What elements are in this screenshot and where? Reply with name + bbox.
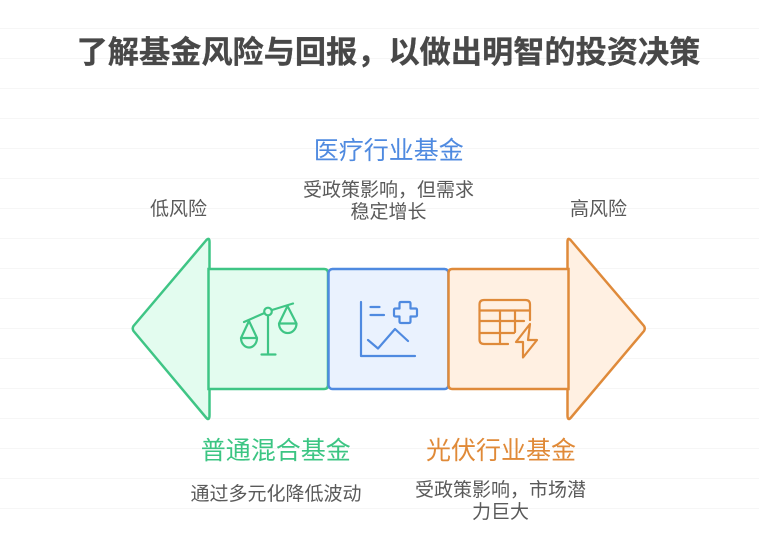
heading: solar fund: 光伏行业基金 (426, 437, 576, 465)
text: healthcare fund description: 受政策影响，但需求 (303, 180, 474, 201)
arrow: high-risk right arrowhead (568, 239, 645, 419)
label: high risk: 高风险 (570, 198, 627, 220)
icon: medical chart (361, 302, 417, 356)
heading: healthcare fund: 医疗行业基金 (314, 137, 464, 165)
panel: healthcare fund segment (328, 269, 448, 389)
text: solar fund description: 受政策影响，市场潜 (415, 480, 586, 501)
text: healthcare fund description: 稳定增长 (350, 201, 427, 223)
title: 了解基金风险与回报，以做出明智的投资决策 (77, 35, 700, 70)
heading: balanced fund: 普通混合基金 (201, 437, 351, 465)
text: solar fund description: 力巨大 (472, 501, 529, 523)
icon: balance scale (241, 304, 296, 354)
arrow: low-risk left arrowhead (133, 239, 210, 419)
text: balanced fund description: 通过多元化降低波动 (190, 483, 362, 505)
label: low risk: 低风险 (150, 198, 207, 220)
panel: balanced fund segment (208, 269, 328, 389)
panel: solar fund segment (448, 269, 568, 389)
icon: table with lightning bolt (480, 300, 537, 358)
